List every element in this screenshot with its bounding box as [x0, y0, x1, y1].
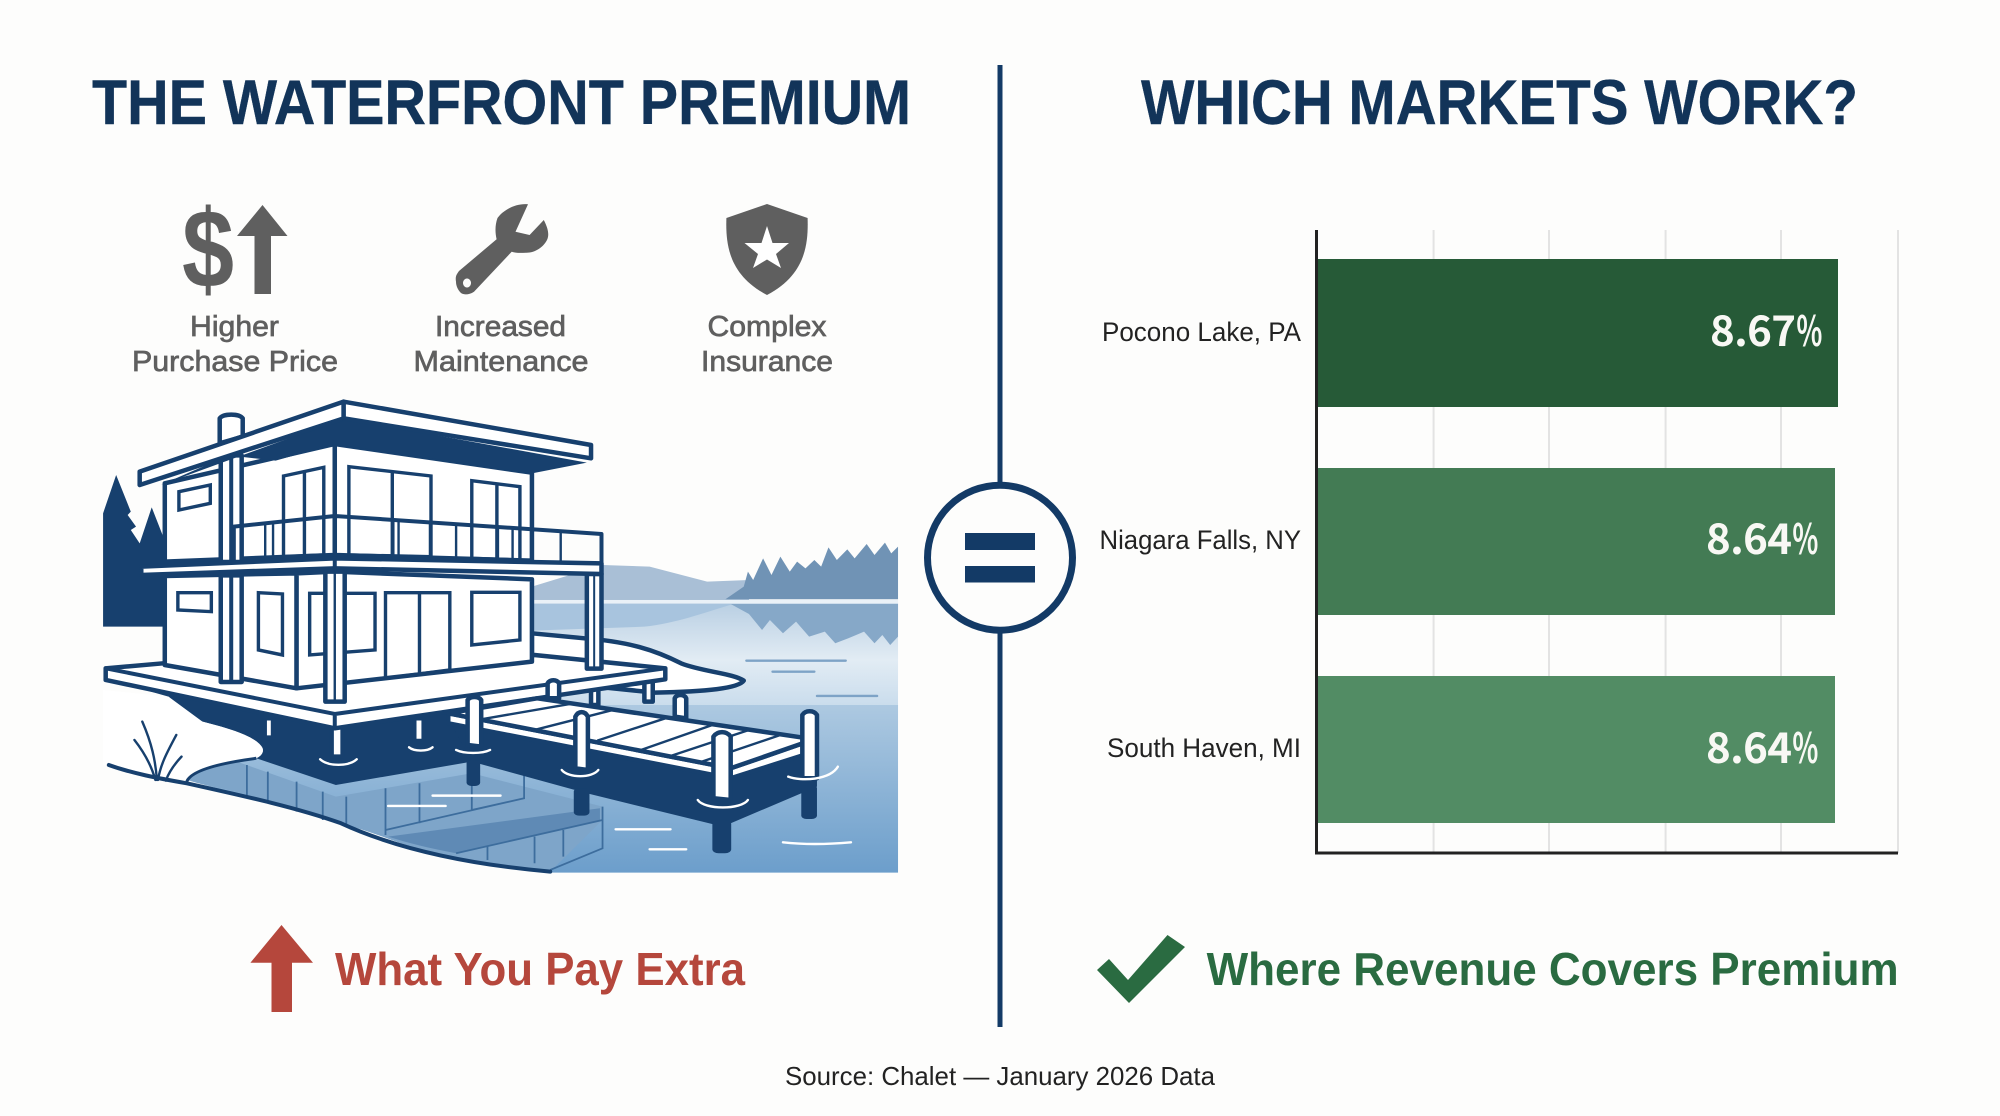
dock side faces — [448, 713, 731, 778]
category labels: Niagara Falls, NY — [1100, 525, 1301, 555]
right title: WHICH MARKETS WORK? — [1141, 68, 1858, 138]
icon: dollar and up arrow: $ — [182, 187, 234, 311]
dock — [320, 680, 838, 807]
cost factor: complex insurance — [701, 204, 833, 378]
distant hills — [532, 565, 749, 600]
cost factor: higher purchase price — [132, 187, 338, 378]
water ripples — [320, 747, 838, 807]
axes — [1316, 230, 1898, 853]
water reflection of hills — [532, 604, 733, 631]
category labels — [1100, 317, 1301, 763]
upper floor windows — [179, 467, 520, 560]
left title: THE WATERFRONT PREMIUM — [92, 68, 911, 138]
bar chart — [1100, 230, 1898, 853]
bar: South Haven — [1318, 676, 1835, 823]
right porch column — [587, 574, 601, 669]
label: higher purchase price — [132, 311, 338, 378]
shoreline — [109, 765, 550, 872]
main deck platform — [106, 655, 665, 728]
dock posts — [468, 680, 817, 800]
bar: Pocono Lake: 8.67% — [1710, 298, 1822, 359]
dock pile reflections — [467, 760, 817, 853]
label: higher purchase price: Purchase Price — [132, 346, 338, 378]
dock top with planks — [448, 698, 814, 768]
reeds — [134, 722, 182, 781]
lower corner column — [221, 575, 242, 682]
upper floor walls — [165, 444, 532, 562]
dock shadow on water — [451, 723, 817, 827]
bar: South Haven: 8.64% — [1706, 715, 1818, 776]
lake lower — [187, 705, 898, 873]
roof slab — [140, 402, 591, 485]
icon: wrench — [456, 204, 548, 294]
lower floor walls — [165, 572, 532, 688]
house reflection — [189, 760, 603, 872]
label: complex insurance: Insurance — [701, 346, 833, 378]
bar: Niagara Falls — [1318, 468, 1835, 615]
lake upper — [532, 603, 898, 707]
center divider line — [998, 65, 1002, 1027]
icon: red up arrow — [250, 925, 313, 1012]
house shadow on water — [121, 680, 665, 785]
source note: Source: Chalet — January 2026 Data — [785, 1061, 1216, 1091]
label: complex insurance: Complex — [708, 311, 827, 343]
label: complex insurance — [701, 311, 833, 378]
deck piles — [265, 680, 653, 757]
grid lines — [1434, 230, 1898, 853]
equals symbol — [928, 485, 1072, 630]
right takeaway — [1097, 935, 1899, 1003]
distant tree line — [725, 543, 898, 599]
sand spit behind house — [532, 633, 744, 693]
upper corner column — [221, 455, 242, 562]
label: increased maintenance — [414, 311, 588, 378]
bar: Niagara Falls: 8.64% — [1706, 506, 1818, 567]
water highlights — [388, 796, 851, 849]
water reflection of trees — [731, 604, 898, 645]
cost factor: increased maintenance — [414, 204, 588, 378]
left pine trees — [103, 475, 166, 627]
roof soffit — [161, 418, 587, 485]
text: where revenue covers premium: Where Revenue Covers Premium — [1207, 943, 1899, 995]
icon: shield with star — [726, 204, 808, 295]
front column — [325, 572, 345, 702]
illustration: waterfront house with dock — [103, 402, 898, 873]
lower floor windows and doors — [178, 592, 520, 678]
chimney — [220, 415, 243, 443]
category labels: Pocono Lake, PA — [1102, 317, 1301, 347]
far water ripples — [746, 661, 877, 696]
category labels: South Haven, MI — [1107, 733, 1301, 763]
balcony railing — [234, 516, 601, 562]
lake horizon — [532, 600, 898, 603]
bar: Pocono Lake — [1318, 259, 1838, 407]
icon: green check mark — [1097, 935, 1185, 1003]
label: increased maintenance: Maintenance — [414, 346, 588, 378]
label: higher purchase price: Higher — [190, 311, 279, 343]
icon: dollar and up arrow — [182, 187, 288, 311]
left takeaway — [250, 925, 745, 1012]
text: what you pay extra: What You Pay Extra — [335, 943, 745, 995]
label: increased maintenance: Increased — [435, 311, 566, 343]
floor slab — [141, 558, 601, 575]
white shoreline bank — [103, 690, 263, 780]
